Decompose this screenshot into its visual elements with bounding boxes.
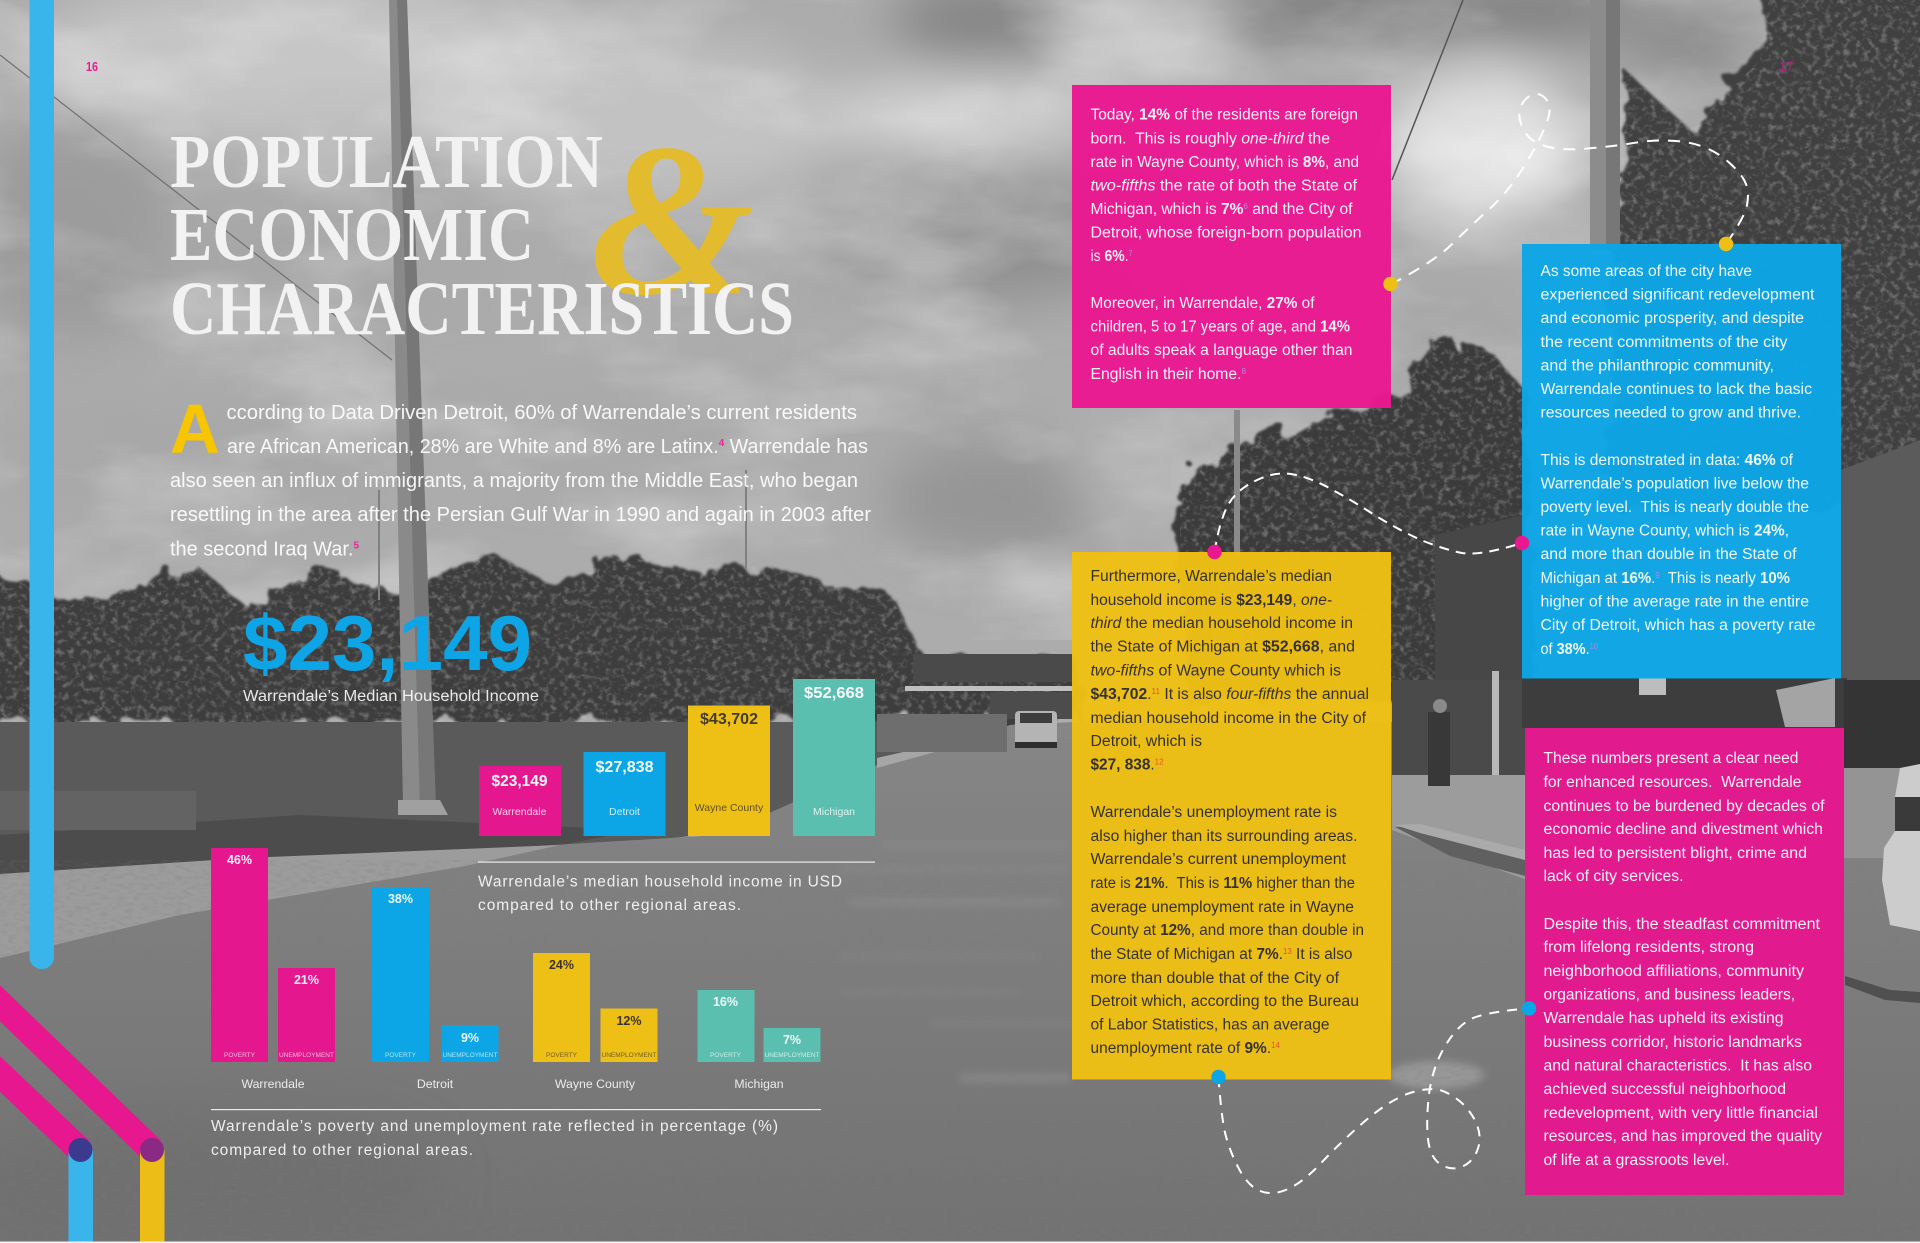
Michigan bars: Michigan bbox=[734, 1077, 784, 1091]
panel: poverty and redevelopment: experienced significant redevelopment bbox=[1540, 286, 1815, 304]
panel: poverty and redevelopment: Michigan at 16%. bbox=[1540, 570, 1655, 587]
panel: poverty and redevelopment: higher of the average rate in the entire bbox=[1540, 594, 1809, 610]
panel: income and unemployment: $43,702. bbox=[1090, 686, 1152, 703]
panel: income and unemployment: It is also bbox=[1160, 686, 1226, 703]
big stat: median household income: Warrendale’s Median Household Income bbox=[243, 688, 539, 705]
panel: need for resources: from lifelong residents, strong bbox=[1544, 939, 1754, 956]
poverty chart caption bbox=[211, 1109, 821, 1159]
bar: Warrendale income: Warrendale bbox=[493, 806, 547, 818]
person and parked car bbox=[1428, 678, 1920, 931]
intro paragraph with drop cap: ccording to Data Driven Detroit, 60% of Warrendale’s current residents bbox=[226, 402, 857, 424]
panel: foreign-born residents: Michigan, which is 7% bbox=[1090, 201, 1243, 218]
panel: income and unemployment: two-fifths of Wayne County which is bbox=[1090, 662, 1341, 680]
bar: Warrendale income bbox=[479, 766, 561, 836]
Warrendale bars: Warrendale bbox=[241, 1077, 305, 1091]
panel: income and unemployment: County at 12%, and more than double in bbox=[1090, 922, 1364, 939]
Detroit bars: 38% bbox=[388, 892, 413, 906]
big stat: median household income: $23,149 bbox=[243, 599, 532, 687]
intro paragraph with drop cap: 5 bbox=[353, 540, 359, 552]
Detroit bars: UNEMPLOYMENT bbox=[443, 1052, 497, 1059]
panel: foreign-born residents: 6 bbox=[1243, 202, 1248, 211]
panel: need for resources bbox=[1525, 728, 1844, 1195]
Detroit bars: 9% bbox=[461, 1031, 479, 1045]
Michigan bars: POVERTY bbox=[710, 1052, 742, 1059]
bar: Michigan income: $52,668 bbox=[804, 685, 864, 702]
panel: poverty and redevelopment: rate in Wayne County, which is 24%, bbox=[1540, 522, 1789, 540]
panel: need for resources: Despite this, the steadfast commitment bbox=[1544, 916, 1821, 933]
panel: need for resources: Warrendale has upheld its existing bbox=[1544, 1010, 1784, 1027]
panel: need for resources: of life at a grassroots level. bbox=[1544, 1152, 1730, 1169]
poverty chart caption: compared to other regional areas. bbox=[211, 1142, 473, 1159]
panel: need for resources: economic decline and divestment which bbox=[1544, 821, 1823, 838]
panel: poverty and redevelopment: and more than double in the State of bbox=[1540, 546, 1797, 563]
heading bbox=[170, 120, 794, 351]
bar: Detroit income: Detroit bbox=[609, 806, 640, 818]
panel: need for resources: achieved successful neighborhood bbox=[1544, 1081, 1786, 1098]
foliage speckle bbox=[0, 0, 1920, 730]
panel: income and unemployment: Warrendale’s unemployment rate is bbox=[1090, 804, 1337, 821]
poverty chart caption: Warrendale’s poverty and unemployment rate reflected in percentage (%) bbox=[211, 1118, 778, 1135]
panel: poverty and redevelopment: This is demonstrated in data: 46% of bbox=[1540, 452, 1794, 469]
panel: need for resources: resources, and has improved the quality bbox=[1544, 1128, 1822, 1145]
connector dots bbox=[1207, 237, 1733, 1084]
panel: income and unemployment: the State of Michigan at 7%. bbox=[1090, 946, 1283, 963]
panel: poverty and redevelopment: and the philanthropic community, bbox=[1540, 358, 1774, 374]
heading: CHARACTERISTICS bbox=[170, 267, 794, 351]
dashed connector: pink box to blue box bbox=[1390, 94, 1748, 284]
panel: need for resources: and natural characteristics. It has also bbox=[1544, 1058, 1812, 1074]
panel: foreign-born residents: rate in Wayne County, which is 8%, and bbox=[1090, 154, 1359, 171]
overpass and distant trees bbox=[913, 654, 1073, 682]
road surface bbox=[0, 722, 1920, 1243]
panel: need for resources: organizations, and business leaders, bbox=[1544, 986, 1795, 1004]
drop cap A: A bbox=[170, 390, 220, 468]
Detroit bars bbox=[372, 888, 498, 1091]
panel: poverty and redevelopment bbox=[1522, 244, 1841, 678]
panel: poverty and redevelopment: Warrendale’s population live below the bbox=[1540, 476, 1809, 492]
Warrendale bars bbox=[211, 848, 335, 1091]
bar: Wayne County income: Wayne County bbox=[695, 802, 764, 814]
panel: foreign-born residents: Moreover, in Warrendale, 27% of bbox=[1090, 295, 1315, 312]
Wayne County bars: UNEMPLOYMENT bbox=[602, 1052, 656, 1059]
page number 17: 17 bbox=[1779, 59, 1793, 74]
panel: poverty and redevelopment: Warrendale continues to lack the basic bbox=[1540, 381, 1812, 398]
bar: Michigan income bbox=[793, 679, 875, 836]
fence and yard bbox=[0, 722, 1000, 880]
heading: POPULATION bbox=[170, 120, 603, 204]
panel: income and unemployment: also higher than its surrounding areas. bbox=[1090, 828, 1358, 845]
bar chart: median household income bbox=[479, 679, 875, 836]
panel: income and unemployment: 11 bbox=[1152, 687, 1161, 696]
income chart caption: Warrendale’s median household income in USD bbox=[478, 874, 842, 890]
bar chart: poverty and unemployment bbox=[211, 848, 820, 1091]
bottom page edge bbox=[0, 1242, 1920, 1243]
panel: foreign-born residents: 7 bbox=[1128, 249, 1133, 258]
intro paragraph with drop cap: Warrendale has bbox=[724, 436, 868, 458]
decorative route: long blue bar at left bbox=[30, 0, 54, 969]
intro paragraph with drop cap: 4 bbox=[719, 438, 725, 449]
Michigan bars: UNEMPLOYMENT bbox=[765, 1052, 819, 1059]
route lines at bottom left bbox=[0, 984, 164, 1243]
panel: need for resources: lack of city services. bbox=[1544, 868, 1684, 885]
panel: foreign-born residents: Today, 14% of the residents are foreign bbox=[1090, 106, 1358, 124]
panel: income and unemployment: average unemployment rate in Wayne bbox=[1090, 899, 1354, 916]
panel: foreign-born residents: children, 5 to 17 years of age, and 14% bbox=[1090, 318, 1350, 336]
bar: Detroit income bbox=[584, 752, 666, 836]
panel: income and unemployment: Furthermore, Warrendale’s median bbox=[1090, 568, 1332, 585]
panel: income and unemployment: $27, 838. bbox=[1090, 756, 1155, 774]
Wayne County bars: 24% bbox=[549, 958, 574, 972]
panel: poverty and redevelopment: City of Detroit, which has a poverty rate bbox=[1540, 617, 1816, 634]
Detroit bars: POVERTY bbox=[385, 1052, 417, 1059]
cloud texture bbox=[0, 0, 1920, 640]
panel: income and unemployment bbox=[1072, 552, 1391, 1080]
panel: income and unemployment: of Labor Statistics, has an average bbox=[1090, 1016, 1330, 1034]
intro paragraph with drop cap: also seen an influx of immigrants, a majority from the Middle East, who began bbox=[170, 470, 858, 492]
panel: income and unemployment: third the median household income in bbox=[1090, 615, 1353, 632]
panel: income and unemployment: unemployment rate of 9%. bbox=[1090, 1040, 1271, 1057]
panel: income and unemployment: median household income in the City of bbox=[1090, 710, 1367, 727]
distant street lights bbox=[378, 470, 747, 600]
panel: foreign-born residents: of adults speak a language other than bbox=[1090, 342, 1352, 359]
panel: income and unemployment: Detroit, which is bbox=[1090, 733, 1202, 750]
Warrendale bars: UNEMPLOYMENT bbox=[279, 1052, 334, 1059]
panel: need for resources: has led to persistent blight, crime and bbox=[1544, 845, 1807, 862]
utility pole left bbox=[389, 0, 436, 810]
panel: income and unemployment: household income is $23,149, one- bbox=[1090, 592, 1332, 609]
bar: Detroit income: $27,838 bbox=[596, 759, 654, 776]
heading ampersand: & bbox=[590, 100, 754, 341]
panel: poverty and redevelopment: and economic prosperity, and despite bbox=[1540, 310, 1804, 327]
Michigan bars: 16% bbox=[713, 995, 738, 1009]
panel: foreign-born residents: born. This is roughly one-third the bbox=[1090, 130, 1330, 148]
panel: need for resources: for enhanced resources. Warrendale bbox=[1544, 774, 1802, 791]
panel: poverty and redevelopment: poverty level. This is nearly double the bbox=[1540, 499, 1809, 516]
dashed connector: yellow box to blue box bbox=[1214, 474, 1522, 554]
car on road bbox=[1015, 711, 1057, 748]
panel: poverty and redevelopment: This is nearly bbox=[1660, 570, 1760, 587]
panel: foreign-born residents bbox=[1072, 85, 1391, 408]
panel: income and unemployment: the State of Michigan at $52,668, and bbox=[1090, 638, 1355, 656]
income chart caption bbox=[478, 862, 875, 914]
panel: income and unemployment: rate is 21%. This is 11% higher than the bbox=[1090, 875, 1355, 892]
panel: income and unemployment: Detroit which, according to the Bureau bbox=[1090, 993, 1359, 1010]
intro paragraph with drop cap bbox=[170, 390, 871, 560]
panel: income and unemployment: more than double that of the City of bbox=[1090, 970, 1340, 987]
intro paragraph with drop cap: are African American, 28% are White and 8% are Latinx. bbox=[227, 436, 726, 458]
Wayne County bars: POVERTY bbox=[546, 1052, 578, 1059]
Wayne County bars bbox=[533, 953, 658, 1091]
Wayne County bars: Wayne County bbox=[555, 1077, 636, 1091]
panel: income and unemployment: It is also bbox=[1292, 946, 1352, 963]
Warrendale bars: 21% bbox=[294, 973, 319, 987]
panel: poverty and redevelopment: As some areas of the city have bbox=[1540, 263, 1752, 280]
panel: income and unemployment: four-fifths the annual bbox=[1226, 686, 1368, 703]
Warrendale bars: 46% bbox=[227, 853, 252, 867]
panel: foreign-born residents: Detroit, whose foreign-born population bbox=[1090, 224, 1362, 242]
panel: foreign-born residents: and the City of bbox=[1248, 201, 1353, 218]
overhead wire left bbox=[0, 55, 392, 360]
panel: need for resources: redevelopment, with very little financial bbox=[1544, 1105, 1818, 1122]
Detroit bars: Detroit bbox=[417, 1077, 454, 1091]
panel: income and unemployment: 14 bbox=[1271, 1041, 1281, 1050]
road patches bbox=[840, 843, 1080, 1083]
panel: poverty and redevelopment: 10 bbox=[1590, 642, 1599, 651]
bar: Wayne County income bbox=[688, 706, 770, 836]
panel: need for resources: business corridor, historic landmarks bbox=[1544, 1034, 1802, 1051]
page number 16: 16 bbox=[86, 59, 98, 74]
trees bbox=[0, 0, 1920, 725]
panel: need for resources: These numbers present a clear need bbox=[1544, 750, 1798, 767]
right pole and wire bbox=[1590, 0, 1620, 250]
bar: Wayne County income: $43,702 bbox=[700, 711, 758, 728]
panel: foreign-born residents: two-fifths the rate of both the State of bbox=[1090, 178, 1358, 194]
panel: income and unemployment: 12 bbox=[1155, 758, 1164, 766]
panel: poverty and redevelopment: of 38%. bbox=[1540, 641, 1590, 658]
bar: Warrendale income: $23,149 bbox=[492, 773, 548, 790]
dashed connector: yellow box to lower pink box bbox=[1218, 1008, 1529, 1193]
panel: poverty and redevelopment: the recent commitments of the city bbox=[1540, 334, 1788, 351]
panel: need for resources: neighborhood affiliations, community bbox=[1544, 963, 1804, 980]
Wayne County bars: 12% bbox=[616, 1014, 642, 1028]
road grain bbox=[0, 860, 1920, 1241]
panel: foreign-born residents: is 6%. bbox=[1090, 248, 1129, 265]
panel: income and unemployment: 13 bbox=[1283, 947, 1292, 956]
buildings and fence bbox=[1435, 515, 1525, 690]
panel: foreign-born residents: English in their home. bbox=[1090, 366, 1240, 383]
panel: foreign-born residents: 8 bbox=[1241, 367, 1247, 376]
Michigan bars bbox=[698, 990, 820, 1091]
intro paragraph with drop cap: resettling in the area after the Persian Gulf War in 1990 and again in 2003 after bbox=[170, 504, 871, 526]
bar: Michigan income: Michigan bbox=[813, 806, 855, 818]
panel: poverty and redevelopment: resources needed to grow and thrive. bbox=[1540, 404, 1801, 422]
heading: ECONOMIC bbox=[170, 193, 534, 277]
Michigan bars: 7% bbox=[783, 1033, 801, 1047]
panel: poverty and redevelopment: 9 bbox=[1655, 571, 1660, 580]
panel: income and unemployment: Warrendale’s current unemployment bbox=[1090, 851, 1347, 868]
Warrendale bars: POVERTY bbox=[224, 1052, 256, 1059]
panel: poverty and redevelopment: 10% bbox=[1760, 570, 1790, 587]
income chart caption: compared to other regional areas. bbox=[478, 897, 741, 914]
panel: need for resources: continues to be burdened by decades of bbox=[1544, 798, 1825, 815]
intro paragraph with drop cap: the second Iraq War. bbox=[170, 538, 354, 560]
